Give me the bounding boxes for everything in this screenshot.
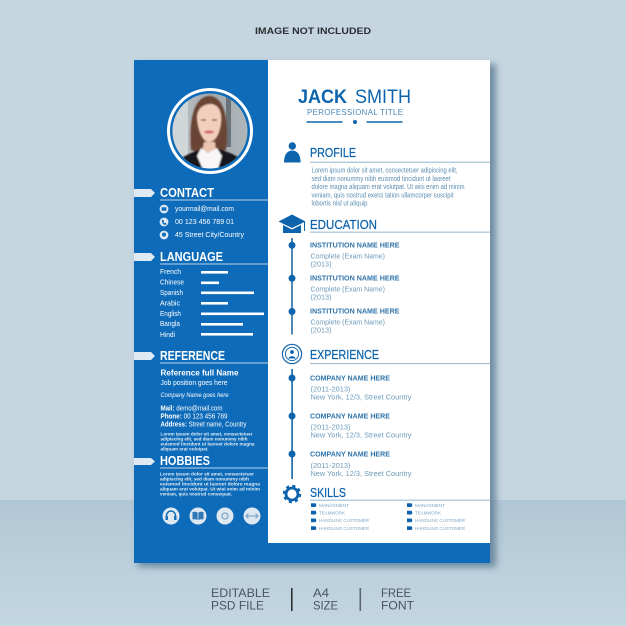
icon: phone bbox=[160, 218, 168, 226]
experience entries: (2011-2013) bbox=[310, 384, 351, 394]
reference details bbox=[160, 368, 255, 452]
icon: person in circle bbox=[282, 344, 302, 364]
education entries: Complete (Exam Name) bbox=[310, 252, 385, 260]
section: profile: PROFILE bbox=[310, 145, 356, 160]
hobbies text: Lorem ipsum dolor sit amet, consectetuer bbox=[160, 472, 254, 476]
hobbies text bbox=[160, 472, 261, 496]
hobbies text: veniam, quis nostrud consequat. bbox=[160, 492, 232, 496]
section: skills: SKILLS bbox=[310, 485, 346, 500]
icon: gear bbox=[284, 486, 300, 502]
experience entries: COMPANY NAME HERE bbox=[310, 412, 390, 420]
section: education bbox=[278, 214, 490, 335]
heading: language bbox=[134, 249, 268, 264]
section: experience: EXPERIENCE bbox=[310, 347, 379, 362]
experience entries: New York, 12/3, Street Country bbox=[310, 392, 412, 402]
experience entries: New York, 12/3, Street Country bbox=[310, 469, 412, 478]
name title: SMITH bbox=[355, 87, 411, 108]
hobbies text: adipiscing elit, sed diam nonummy nibh bbox=[160, 476, 249, 482]
language skill bars: Hindi bbox=[160, 330, 175, 339]
education entries bbox=[310, 240, 400, 335]
heading: contact bbox=[134, 185, 268, 200]
top note: IMAGE NOT INCLUDED bbox=[255, 26, 371, 37]
card blue base bbox=[134, 60, 490, 563]
profile text: dolore magna aliquam erat volutpat. Ut wisi enim ad minim bbox=[312, 184, 465, 191]
icon: location bbox=[160, 231, 168, 239]
reference details: aliquam erat volutpat. bbox=[160, 446, 208, 452]
experience entries: (2011-2013) bbox=[310, 423, 351, 432]
icon: graduation cap bbox=[278, 214, 306, 233]
profile text: lobortis nisl ut aliquip bbox=[312, 200, 368, 208]
section: education: EDUCATION bbox=[310, 217, 377, 232]
icon: person bbox=[284, 142, 301, 162]
footer feature labels: PSD FILE bbox=[211, 600, 264, 612]
skills column 2: HANDLING CUSTOMER bbox=[415, 518, 466, 523]
icon: headphones bbox=[162, 508, 180, 524]
language skill bars: Bangla bbox=[160, 319, 180, 328]
skills column 1: HANDLING CUSTOMER bbox=[319, 518, 370, 523]
profile text bbox=[312, 168, 465, 208]
education entries: Complete (Exam Name) bbox=[310, 284, 385, 294]
name title: PEROFESSIONAL TITLE bbox=[307, 108, 403, 117]
heading: hobbies bbox=[134, 453, 268, 468]
panel: main content bbox=[278, 87, 490, 531]
reference details: Reference full Name bbox=[160, 368, 239, 378]
section: experience bbox=[282, 344, 490, 479]
education entries: INSTITUTION NAME HERE bbox=[310, 240, 400, 250]
language skill bars bbox=[160, 267, 264, 339]
reference details: Lorem ipsum dolor sit amet, consectetuer bbox=[160, 432, 253, 436]
footer feature labels: FREE bbox=[381, 588, 411, 600]
profile photo bbox=[168, 90, 252, 172]
heading: language: LANGUAGE bbox=[160, 249, 223, 264]
contact rows: 00 123 456 789 01 bbox=[175, 217, 234, 226]
icon: refresh bbox=[216, 508, 234, 524]
profile text: veniam, quis nostrud exerci tation ullamcorper suscipit bbox=[312, 192, 454, 199]
name title: JACK bbox=[298, 87, 347, 108]
experience entries: (2011-2013) bbox=[310, 461, 351, 470]
footer feature labels: A4 bbox=[313, 588, 330, 600]
education entries: Complete (Exam Name) bbox=[310, 318, 385, 327]
name title bbox=[298, 87, 411, 124]
reference details: Company Name goes here bbox=[160, 392, 229, 399]
reference details: adipiscing elit, sed diam nonummy nibh bbox=[160, 436, 248, 442]
panel: sidebar bbox=[134, 90, 268, 524]
language skill bars: French bbox=[160, 267, 181, 276]
icon: dumbbell bbox=[244, 508, 260, 524]
icon: mail bbox=[160, 205, 168, 213]
contact rows bbox=[160, 204, 244, 239]
skills column 2: TEAMWORK bbox=[415, 510, 442, 515]
experience entries: COMPANY NAME HERE bbox=[310, 374, 390, 382]
contact rows: 45 Street City/Country bbox=[175, 230, 244, 239]
section: profile bbox=[284, 142, 490, 208]
white content panel bbox=[268, 60, 490, 543]
language skill bars: Arabic bbox=[160, 298, 180, 308]
card shadow bbox=[138, 64, 496, 567]
contact rows: yourmail@mail.com bbox=[175, 204, 234, 213]
section: skills bbox=[284, 485, 490, 531]
reference details: Mail: demo@mail.com bbox=[160, 406, 223, 412]
footer feature labels: SIZE bbox=[313, 600, 338, 612]
hobby icons bbox=[162, 508, 260, 524]
profile text: sed diam nonummy nibh euismod tincidunt ut laoreet bbox=[312, 176, 451, 183]
experience timeline bbox=[288, 369, 296, 479]
hobbies text: aliquam erat volutpat. Ut wisi enim ad minim bbox=[160, 486, 260, 492]
education entries: (2013) bbox=[310, 326, 332, 335]
experience entries: COMPANY NAME HERE bbox=[310, 450, 390, 459]
language skill bars: Spanish bbox=[160, 288, 183, 297]
profile text: Lorem ipsum dolor sit amet, consectetuer adipiscing elit, bbox=[312, 168, 458, 174]
education entries: (2013) bbox=[310, 292, 332, 302]
skills column 1: MANAGMENT bbox=[319, 503, 349, 508]
reference details: Phone: 00 123 456 789 bbox=[160, 414, 228, 420]
experience entries: New York, 12/3, Street Country bbox=[310, 431, 412, 440]
language skill bars: English bbox=[160, 309, 181, 318]
heading: hobbies: HOBBIES bbox=[160, 453, 210, 468]
heading: reference: REFERENCE bbox=[160, 348, 225, 363]
skills column 1 bbox=[311, 503, 370, 531]
reference details: Job position goes here bbox=[160, 378, 228, 387]
icon: book bbox=[190, 508, 206, 524]
footer feature labels: FONT bbox=[381, 600, 414, 612]
skills column 2 bbox=[407, 503, 466, 531]
language skill bars: Chinese bbox=[160, 278, 184, 286]
footer feature labels bbox=[211, 588, 414, 612]
resume card bbox=[134, 60, 490, 563]
reference details: Address: Street name, Country bbox=[160, 422, 247, 428]
education entries: (2013) bbox=[310, 260, 332, 268]
heading: contact: CONTACT bbox=[160, 185, 214, 200]
education entries: INSTITUTION NAME HERE bbox=[310, 307, 400, 316]
skills column 2: HANDLING CUSTOMER bbox=[415, 526, 466, 531]
education entries: INSTITUTION NAME HERE bbox=[310, 274, 400, 282]
heading: reference bbox=[134, 348, 268, 364]
skills column 2: MANAGMENT bbox=[415, 503, 445, 508]
skills column 1: HANDLING CUSTOMER bbox=[319, 526, 370, 531]
experience entries bbox=[310, 374, 412, 478]
skills column 1: TEAMWORK bbox=[319, 510, 346, 515]
footer feature labels: EDITABLE bbox=[211, 588, 270, 600]
reference details: euismod tincidunt ut laoreet dolore magna bbox=[160, 442, 255, 446]
education timeline bbox=[288, 238, 296, 334]
hobbies text: euismod tincidunt ut laoreet dolore magna bbox=[160, 482, 261, 486]
